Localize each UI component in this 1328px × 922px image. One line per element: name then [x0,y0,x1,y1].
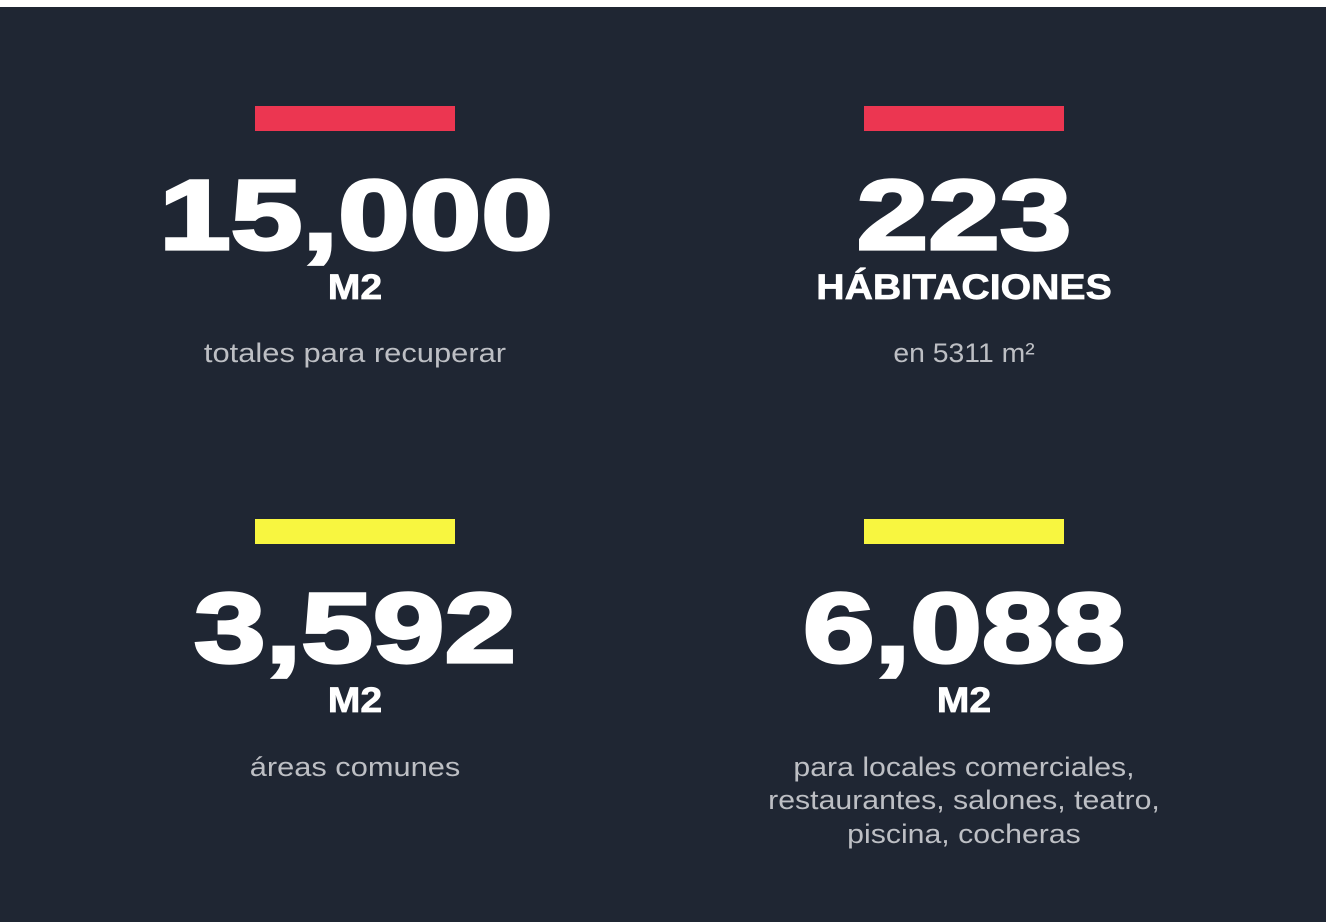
number: 15,000: 15,000 [159,159,553,270]
unit: habitaciones: HÁBITACIONES [816,268,1112,307]
yellow accent bar [255,519,455,544]
yellow accent bar [864,519,1064,544]
description: locales comerciales: piscina, cocheras [847,818,1081,848]
description: en 5311 m²: en 5311 m² [893,338,1035,368]
description: locales comerciales: para locales comerciales, [793,752,1135,782]
panel: 6,088 m2 [768,519,1160,848]
number: 3,592: 3,592 [194,572,516,683]
description: áreas comunes: áreas comunes [250,752,460,782]
number: 6,088: 6,088 [803,572,1125,683]
red accent bar [255,106,455,131]
description: locales comerciales [768,752,1160,848]
description: totales para recuperar: totales para recuperar [204,338,506,368]
panel: 15,000 m2 [159,106,553,368]
unit: M2: M2 [328,268,382,307]
red accent bar [864,106,1064,131]
panel: 3,592 m2 [194,519,516,782]
number: 223: 223 [857,159,1071,270]
unit: M2: M2 [937,681,991,720]
description: locales comerciales: restaurantes, salones, teatro, [768,785,1160,815]
unit: M2: M2 [328,681,382,720]
panel: 223 habitaciones [816,106,1112,368]
